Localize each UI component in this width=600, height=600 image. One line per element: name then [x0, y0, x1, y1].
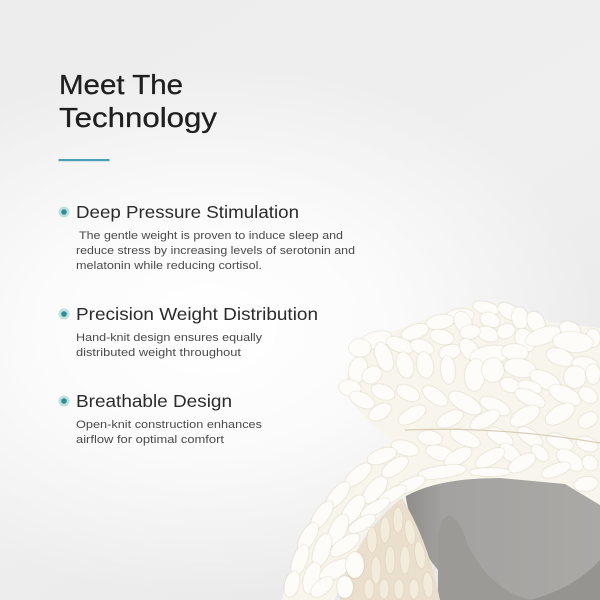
concrete vase	[405, 478, 600, 600]
bullet icon	[58, 308, 70, 320]
title: Technology	[59, 102, 217, 133]
feature description: Open-knit construction enhances	[76, 419, 263, 431]
feature description	[76, 419, 263, 446]
title	[59, 69, 217, 133]
accent line	[58, 159, 110, 161]
fold shadow line	[405, 429, 600, 443]
folded top stitches	[340, 301, 598, 395]
feature heading: Deep Pressure Stimulation	[76, 202, 299, 222]
feature description: reduce stress by increasing levels of serotonin and	[76, 245, 355, 257]
feature description	[76, 230, 355, 272]
feature description: melatonin while reducing cortisol.	[76, 260, 262, 272]
feature: deep pressure stimulation	[58, 202, 355, 272]
feature description	[76, 332, 263, 359]
feature heading: Breathable Design	[76, 391, 232, 411]
bullet icon	[58, 396, 70, 406]
feature description: The gentle weight is proven to induce sleep and	[79, 230, 343, 242]
bullet icon	[58, 206, 70, 218]
folded herringbone row	[350, 383, 597, 431]
blanket inner fold	[340, 498, 440, 600]
feature: breathable design	[58, 391, 263, 446]
blanket base silhouette	[282, 302, 600, 600]
feature description: distributed weight throughout	[76, 347, 241, 359]
feature description: airflow for optimal comfort	[76, 434, 224, 446]
feature: precision weight distribution	[58, 304, 318, 359]
feature description: Hand-knit design ensures equally	[76, 332, 263, 344]
wrapped herringbone row	[392, 426, 598, 490]
title: Meet The	[59, 69, 183, 100]
feature heading: Precision Weight Distribution	[76, 304, 318, 324]
wrapped arc stitches	[284, 447, 424, 598]
photo: knit blanket on concrete vase	[282, 301, 600, 600]
